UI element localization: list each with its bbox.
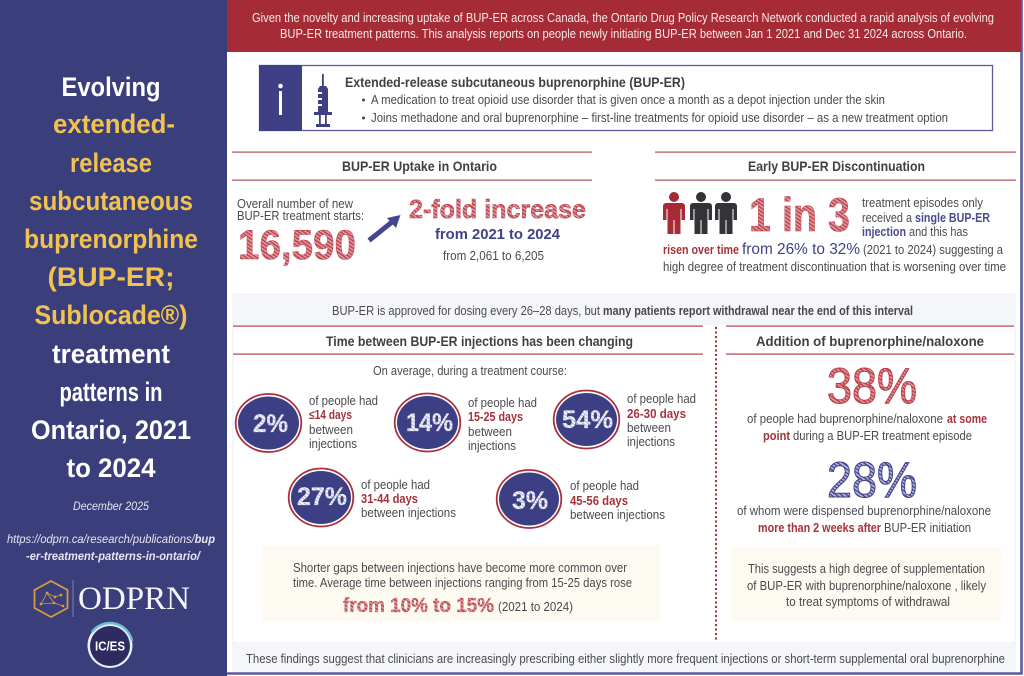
publication url: https://odprn.ca/research/publications/bup (7, 532, 215, 546)
stat: 27 percent: 27% (297, 483, 347, 511)
title: Evolving (62, 72, 160, 102)
discontinuation heading: Early BUP-ER Discontinuation (748, 158, 925, 174)
stat: 14 percent: between (468, 425, 512, 439)
stat 28 description: BUP-ER initiation (884, 521, 971, 535)
dosing note: BUP-ER is approved for dosing every 26–28 days, but (332, 304, 600, 318)
stat period: from 2021 to 2024 (435, 226, 561, 243)
discontinuation text: treatment episodes only (862, 196, 984, 210)
callout: supplementation (731, 548, 1001, 621)
stat: 14 percent: injections (468, 439, 516, 453)
stat: 2 percent: between (309, 423, 353, 437)
stat: 54 percent: between (627, 421, 671, 435)
callout: shorter gaps: (2021 to 2024) (498, 600, 573, 614)
publication url: -er-treatment-patterns-in-ontario/ (26, 549, 202, 563)
definition heading: Extended-release subcutaneous buprenorphine (BUP-ER) (345, 74, 685, 90)
panel: uptake (232, 152, 592, 268)
dosing note: many patients report withdrawal near the end of this interval (603, 304, 913, 318)
stat: 27 percent: 31-44 days (361, 492, 418, 506)
icon: syringe (314, 74, 332, 127)
stat: 54 percent: 54% (562, 406, 613, 434)
publication date: December 2025 (73, 499, 149, 513)
discontinuation text: single BUP-ER (915, 211, 990, 225)
stat range: from 2,061 to 6,205 (443, 249, 544, 263)
title: (BUP-ER; (48, 262, 174, 292)
discontinuation text: from 26% to 32% (742, 241, 860, 258)
uptake heading: BUP-ER Uptake in Ontario (342, 158, 497, 174)
callout: supplementation: This suggests a high degree of supplementation (748, 562, 985, 576)
stat: 2 percent: of people had (309, 394, 378, 408)
title: patterns in (60, 377, 162, 407)
stat: 2 percent: injections (309, 437, 357, 451)
stat: 2 percent (236, 394, 378, 452)
stat 38 description: point (763, 429, 791, 443)
overall starts label (237, 197, 364, 223)
stat: 2 percent: 2% (253, 410, 288, 438)
stat: 3 percent: 45-56 days (570, 494, 628, 508)
callout: shorter gaps (262, 545, 660, 621)
injections heading: Time between BUP-ER injections has been changing (326, 333, 633, 349)
stat: 3 percent: 3% (512, 487, 548, 515)
title (24, 72, 198, 483)
dosing note (332, 304, 913, 318)
frame border (227, 0, 1022, 674)
stat: 14 percent: of people had (468, 396, 537, 410)
discontinuation text: received a (862, 211, 912, 225)
definition bullets (362, 93, 948, 125)
callout: shorter gaps: from 10% to 15% (343, 595, 494, 617)
stat 28 description (737, 504, 991, 535)
discontinuation text: injection (862, 225, 906, 239)
logo: IC/ES: IC/ES (95, 638, 125, 654)
title: buprenorphine (24, 224, 198, 254)
discontinuation text: risen over time (663, 243, 739, 257)
stat: 54 percent: 26-30 days (627, 407, 686, 421)
stat: 27 percent: between injections (361, 506, 456, 520)
publication url (7, 532, 215, 563)
title: treatment (52, 339, 170, 369)
naloxone heading: Addition of buprenorphine/naloxone (756, 333, 984, 349)
title: to 2024 (66, 453, 156, 483)
stat 38 description: of people had buprenorphine/naloxone (747, 412, 943, 426)
title: subcutaneous (29, 186, 193, 216)
panel: discontinuation (655, 152, 1016, 274)
panel: addition of buprenorphine/naloxone (726, 326, 1014, 621)
stat: 3 percent: of people had (570, 479, 639, 493)
stat: 3 percent (497, 470, 665, 528)
stat: 3 percent: between injections (570, 508, 665, 522)
callout: shorter gaps: time. Average time between injections ranging from 15-25 days rose (293, 576, 632, 590)
panel: sidebar (0, 0, 227, 676)
panel: BUP-ER definition (259, 65, 992, 131)
stat: 54 percent (554, 390, 696, 449)
logo: IC/ES (88, 623, 132, 668)
stat: 2 percent: ≤14 days (309, 408, 352, 422)
title: Sublocade®) (34, 300, 188, 330)
stat: 27 percent: of people had (361, 478, 430, 492)
stat: 38 percent: 38% (827, 358, 917, 414)
stat: 54 percent: of people had (627, 392, 696, 406)
discontinuation text: (2021 to 2024) suggesting a (863, 243, 1003, 257)
stat 28 description: of whom were dispensed buprenorphine/naloxone (737, 504, 991, 518)
banner: intro (227, 0, 1021, 52)
callout: shorter gaps: Shorter gaps between injections have become more common over (293, 561, 627, 575)
title: Ontario, 2021 (31, 415, 191, 445)
arrow: increase (369, 215, 400, 240)
stat: 16,590: 16,590 (238, 221, 356, 268)
stat: 14 percent (395, 394, 537, 453)
definition bullets: Joins methadone and oral buprenorphine – first-line treatments for opioid use disorder – as a new treatment option (371, 111, 948, 125)
stat 38 description: during a BUP-ER treatment episode (793, 429, 972, 443)
title: release (70, 148, 152, 178)
logo: ODPRN (34, 580, 190, 617)
discontinuation text: and this has (909, 225, 968, 239)
stat: 27 percent (289, 468, 456, 526)
stat 38 description (747, 412, 987, 443)
overall starts label: Overall number of new (237, 197, 354, 211)
panel: time between injections (233, 326, 703, 621)
stat: 14 percent: 15-25 days (468, 410, 523, 424)
stat 28 description: more than 2 weeks after (758, 521, 881, 535)
dotted divider (715, 327, 717, 641)
stat: 1 in 3: 1 in 3 (749, 188, 850, 241)
stat: 28 percent: 28% (827, 452, 917, 508)
icon: information (259, 65, 302, 131)
stat: 14 percent: 14% (406, 409, 453, 437)
panel: lower background (232, 293, 1016, 672)
stat: 2-fold increase: 2-fold increase (409, 194, 586, 224)
logo: ODPRN: ODPRN (78, 581, 190, 617)
title: extended- (53, 109, 175, 139)
icon: one in three people (663, 192, 737, 234)
overall starts label: BUP-ER treatment starts: (237, 209, 364, 223)
stat 38 description: at some (947, 412, 987, 426)
callout: supplementation: of BUP-ER with buprenorphine/naloxone , likely (747, 579, 987, 593)
stat: 54 percent: injections (627, 435, 675, 449)
injections intro: On average, during a treatment course: (373, 364, 567, 378)
definition bullets: A medication to treat opioid use disorder that is given once a month as a depot injection under the skin (371, 93, 885, 107)
callout: supplementation: to treat symptoms of withdrawal (786, 595, 950, 609)
discontinuation text (663, 196, 1006, 274)
